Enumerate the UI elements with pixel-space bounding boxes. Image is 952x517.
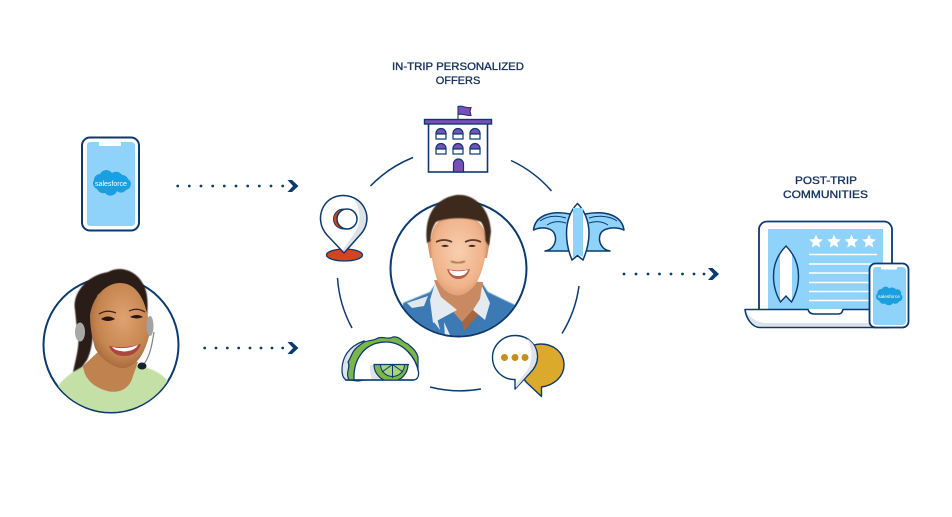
heading: in-trip personalized offers bbox=[392, 61, 524, 87]
phone with salesforce logo bbox=[82, 138, 139, 230]
portrait: traveler bbox=[390, 195, 526, 345]
heading: in-trip personalized offers: IN-TRIP PERSONALIZED bbox=[392, 61, 524, 73]
icon: phone with salesforce logo bbox=[870, 264, 908, 328]
heading: post-trip communities bbox=[783, 175, 868, 201]
arrow: phone to journey bbox=[176, 180, 298, 192]
hotel windows bbox=[436, 128, 480, 172]
gold bubble bbox=[520, 344, 564, 396]
rating stars bbox=[809, 234, 876, 248]
arrow: journey to post-trip bbox=[623, 268, 719, 280]
heading: post-trip communities: POST-TRIP bbox=[795, 175, 857, 187]
surfboard bbox=[774, 246, 798, 302]
headset bbox=[75, 316, 154, 370]
icon: surfboard and waves bbox=[534, 204, 624, 260]
icon: chat bubbles bbox=[492, 336, 564, 396]
icon: hotel bbox=[424, 106, 492, 172]
heading: post-trip communities: COMMUNITIES bbox=[783, 189, 868, 201]
ears bbox=[427, 239, 490, 258]
white bubble bbox=[492, 336, 538, 389]
icon: location pin bbox=[320, 196, 368, 261]
icon: laptop with reviews bbox=[745, 222, 895, 328]
salesforce cloud: salesforce bbox=[878, 294, 900, 300]
surfboard bbox=[566, 204, 589, 260]
arrow: agent to journey bbox=[203, 342, 298, 354]
infographic canvas bbox=[42, 62, 910, 414]
agent portrait bbox=[44, 269, 178, 415]
lime slice bbox=[373, 364, 409, 380]
review lines bbox=[809, 254, 877, 300]
heading: in-trip personalized offers: OFFERS bbox=[436, 75, 480, 87]
salesforce cloud: salesforce bbox=[95, 181, 127, 188]
icon: taco bbox=[342, 337, 419, 382]
waves bbox=[534, 213, 624, 251]
journey ring segments bbox=[338, 158, 579, 391]
typing dots bbox=[501, 354, 528, 361]
